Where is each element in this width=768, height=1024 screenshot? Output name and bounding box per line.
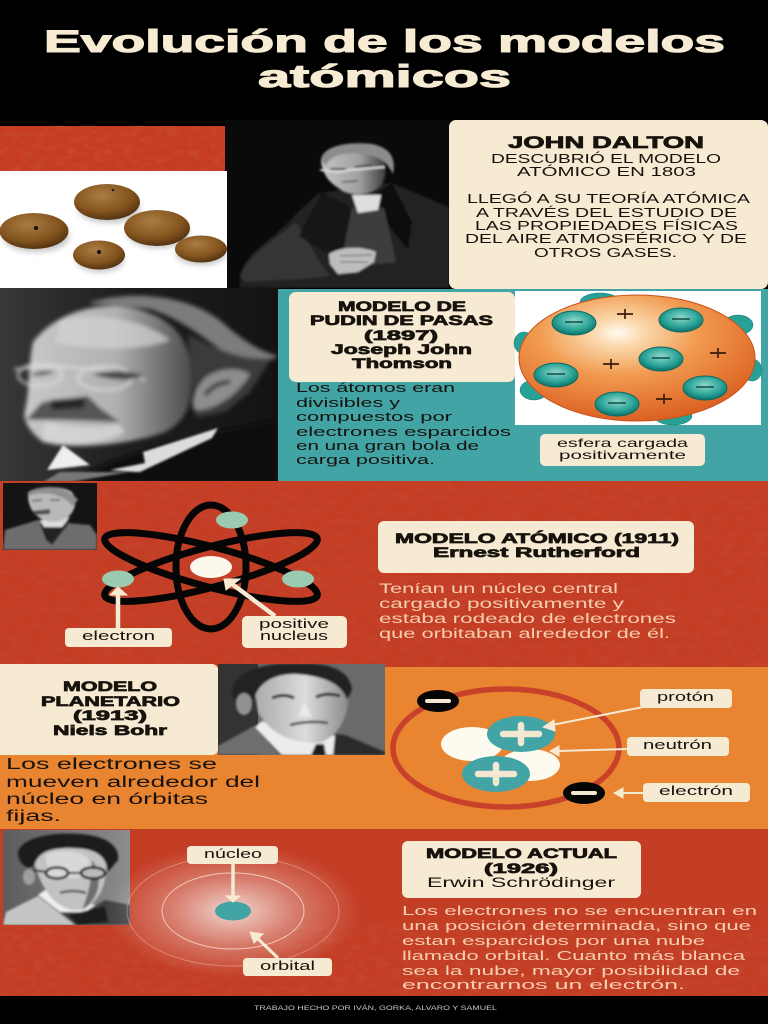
panel: Thomson plum pudding model (0, 288, 768, 482)
portrait: John Dalton (225, 120, 449, 288)
label: esfera cargada positivamente: positivamente (559, 448, 687, 462)
label: esfera cargada positivamente: esfera cargada (557, 436, 689, 450)
card: Thomson heading (289, 292, 515, 382)
label: neutrón (627, 737, 729, 756)
label: núcleo: núcleo (204, 846, 262, 861)
text: Thomson description (296, 380, 512, 467)
text: Rutherford description: Tenían un núcleo central (379, 581, 618, 596)
text: Rutherford description: cargado positivamente y (379, 596, 624, 611)
title (44, 23, 725, 94)
portrait: Erwin Schrödinger (3, 830, 130, 925)
label: electron: electron (82, 629, 155, 643)
portrait: Niels Bohr (218, 664, 385, 755)
card: Rutherford heading: MODELO ATÓMICO (1911) (395, 531, 679, 546)
card: Thomson heading: Thomson (352, 356, 452, 371)
arrow: electron (110, 587, 127, 628)
arrow: electrón (614, 788, 643, 798)
text: Thomson description: compuestos por (296, 409, 453, 424)
card: Schrödinger heading: (1926) (484, 861, 558, 876)
panel: Bohr planetary model (0, 664, 768, 829)
text: Thomson description: electrones esparcidos (296, 424, 512, 439)
title: Evolución de los modelos (44, 23, 725, 59)
card: John Dalton: ATÓMICO EN 1803 (517, 164, 696, 179)
card: Bohr heading: MODELO (63, 679, 157, 694)
card: Thomson heading: (1897) (364, 328, 438, 343)
text: Thomson description: divisibles y (296, 395, 401, 410)
text: Bohr description: Los electrones se (6, 756, 217, 773)
card: Schrödinger heading (402, 841, 641, 898)
portrait: Joseph John Thomson (0, 288, 278, 482)
card: Rutherford heading (378, 521, 694, 573)
text: Thomson description: en una gran bola de (296, 438, 479, 453)
arrow: neutrón (550, 746, 627, 756)
text: Thomson description: Los átomos eran (296, 380, 455, 395)
panel: Schrödinger current model (0, 829, 768, 997)
text: Rutherford description: estaba rodeado de electrones (379, 611, 676, 626)
text: Rutherford description (379, 581, 676, 641)
card: Thomson heading: MODELO DE (338, 299, 466, 314)
card: John Dalton (449, 120, 768, 289)
card: John Dalton: DESCUBRIÓ EL MODELO (491, 151, 721, 166)
diagram: Rutherford atom (100, 505, 322, 629)
card: Rutherford heading: Ernest Rutherford (433, 545, 640, 560)
footer (0, 996, 768, 1024)
image: atomic spheres (0, 171, 227, 288)
label: orbital: orbital (260, 958, 315, 973)
header background (0, 0, 768, 126)
footer: TRABAJO HECHO POR IVÁN, GORKA, ALVARO Y SAMUEL (254, 1003, 498, 1012)
label: positive nucleus: nucleus (260, 629, 328, 643)
text: Bohr description (6, 756, 260, 825)
text: Thomson description: carga positiva. (296, 452, 435, 467)
card: Bohr heading: PLANETARIO (41, 694, 180, 709)
card: John Dalton: OTROS GASES. (534, 246, 677, 260)
text: Schrödinger description: una posición determinada, sino que (402, 918, 751, 933)
text: Schrödinger description: sea la nube, mayor posibilidad de (402, 963, 740, 978)
arrow: orbital (250, 932, 278, 958)
card: Bohr heading: (1913) (73, 708, 147, 723)
label: neutrón: neutrón (643, 738, 712, 752)
diagram: Bohr atom (393, 689, 619, 807)
text: Bohr description: núcleo en órbitas (6, 791, 208, 808)
label: protón: protón (657, 690, 714, 704)
label: núcleo (187, 846, 278, 864)
card: Thomson heading: PUDIN DE PASAS (310, 313, 493, 328)
text: Schrödinger description: Los electrones no se encuentran en (402, 903, 757, 918)
text: Schrödinger description: encontrarnos un electrón. (402, 977, 685, 992)
card: John Dalton: JOHN DALTON (508, 134, 704, 152)
text: Bohr description: fijas. (6, 808, 61, 825)
card: John Dalton: A TRAVÉS DEL ESTUDIO DE (476, 205, 737, 220)
card: Thomson heading: Joseph John (331, 342, 472, 357)
card: Schrödinger heading: MODELO ACTUAL (426, 846, 617, 861)
diagram: plum pudding atom (514, 291, 762, 425)
arrow: positive nucleus (224, 579, 275, 616)
panel: Rutherford model (0, 481, 768, 667)
text: Rutherford description: que orbitaban alrededor de él. (379, 626, 670, 641)
portrait: Ernest Rutherford (3, 483, 97, 550)
label: electrón (643, 783, 750, 802)
text: Schrödinger description (402, 903, 757, 992)
panel: John Dalton (0, 120, 768, 289)
card: John Dalton: LLEGÓ A SU TEORÍA ATÓMICA (467, 191, 751, 206)
text: Bohr description: mueven alrededor del (6, 774, 260, 791)
arrow: núcleo (226, 864, 240, 902)
label: positive nucleus (242, 616, 347, 648)
label: positive nucleus: positive (259, 617, 329, 631)
title: atómicos (258, 58, 511, 94)
card: Bohr heading: Niels Bohr (53, 723, 168, 738)
label: protón (640, 689, 732, 708)
label: esfera cargada positivamente (540, 434, 705, 466)
card: Bohr heading (0, 664, 218, 755)
card: John Dalton: LAS PROPIEDADES FÍSICAS (475, 218, 738, 233)
arrow: protón (543, 707, 643, 731)
card: Schrödinger heading: Erwin Schrödinger (427, 875, 616, 890)
text: Schrödinger description: estan esparcidos por una nube (402, 933, 705, 948)
text: Schrödinger description: llamado orbital. Cuanto más blanca (402, 948, 746, 963)
label: electron (65, 628, 172, 647)
label: orbital (243, 958, 332, 976)
diagram: orbital cloud (106, 845, 360, 977)
card: John Dalton: DEL AIRE ATMOSFÉRICO Y DE (465, 231, 747, 246)
label: electrón: electrón (659, 784, 733, 798)
